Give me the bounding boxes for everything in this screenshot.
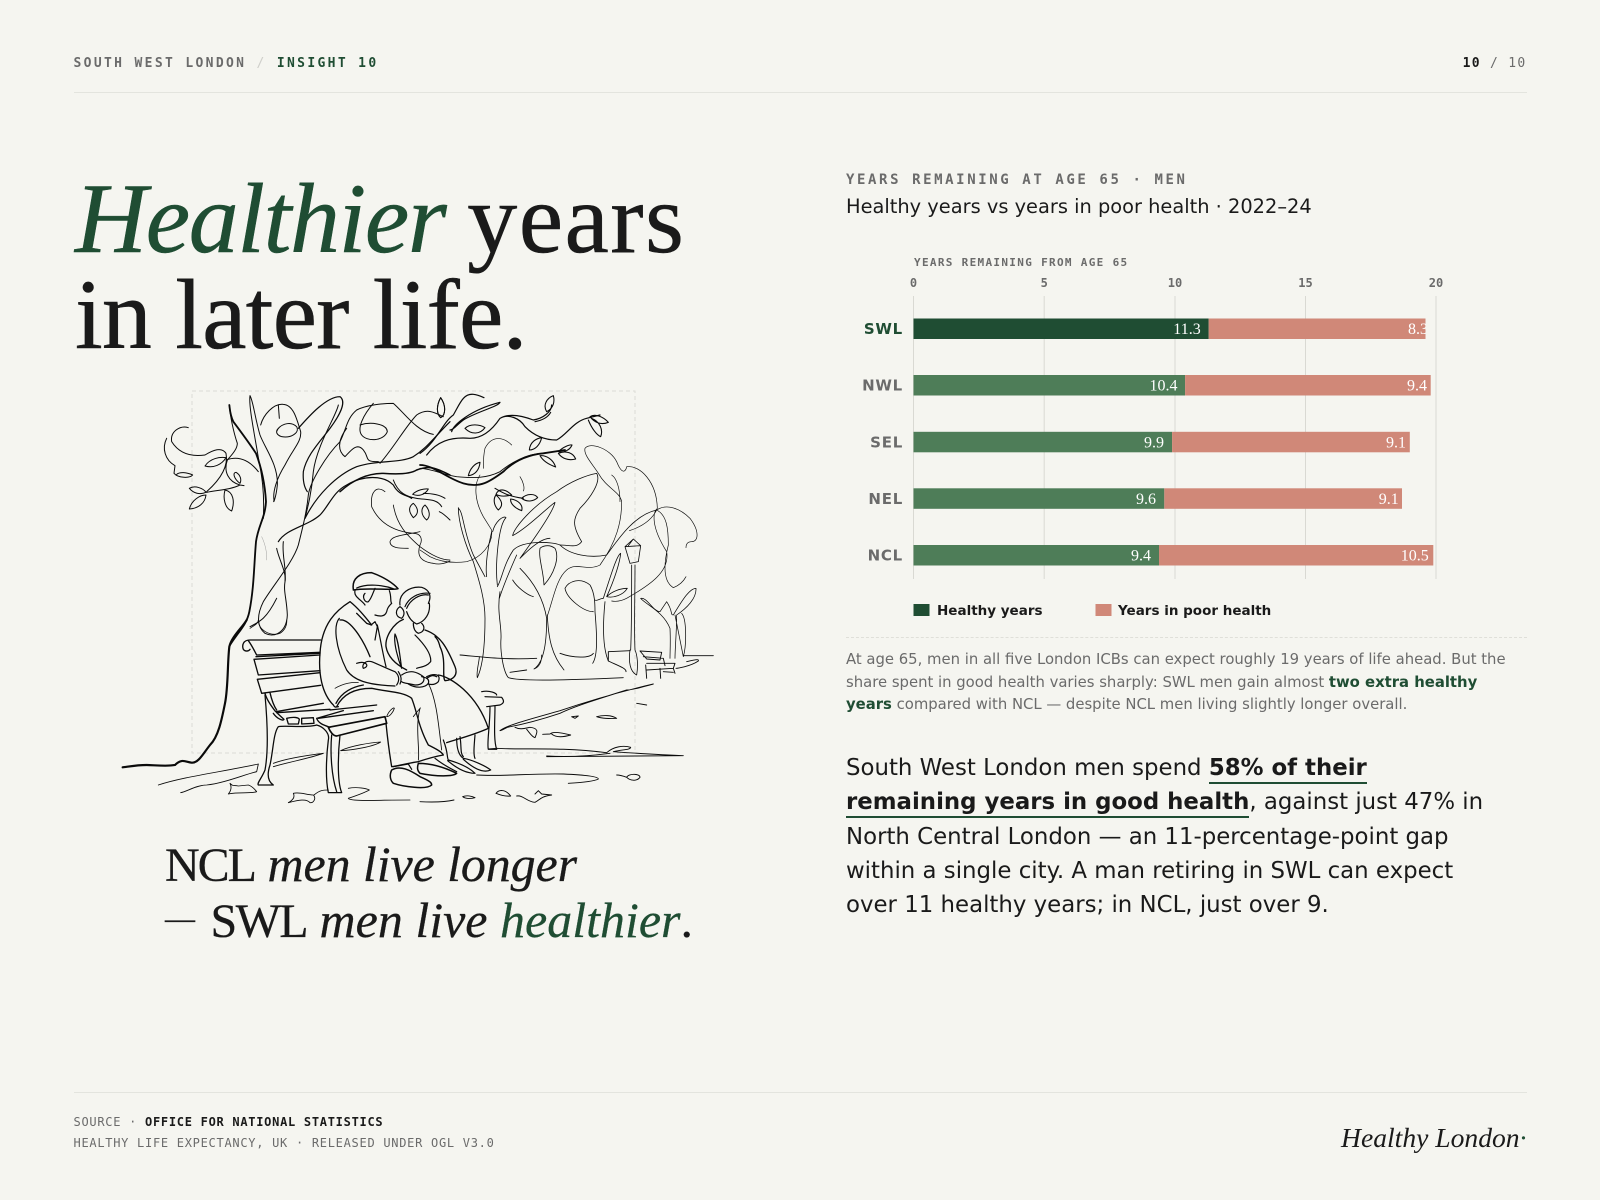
row: SWL: [864, 318, 1428, 339]
illustration: elderly couple on a park bench: [122, 390, 714, 804]
key finding paragraph: North Central London — an 11-percentage-point gap: [846, 824, 1449, 850]
commentary paragraph: years compared with NCL — despite NCL men living slightly longer overall.: [846, 696, 1407, 713]
footer: source: SOURCE · OFFICE FOR NATIONAL STATISTICS: [74, 1115, 383, 1129]
commentary paragraph: At age 65, men in all five London ICBs can expect roughly 19 years of life ahead. But the: [846, 651, 1506, 668]
axis ticks: 10: [1168, 276, 1182, 290]
row: SWL: SWL: [864, 320, 903, 338]
bar chart: healthy vs poor-health years by ICB: [862, 256, 1443, 619]
key finding paragraph: [846, 755, 1483, 918]
icon: street lamp: [625, 539, 641, 675]
axis ticks: 5: [1041, 276, 1048, 290]
axis ticks: 20: [1429, 276, 1443, 290]
key finding paragraph: remaining years in good health, against just 47% in: [846, 789, 1483, 815]
legend: Years in poor health: [1117, 603, 1271, 619]
header: page number: 10 / 10: [1463, 56, 1526, 71]
row: NWL: 9.4: [1407, 378, 1427, 394]
row: SEL: 9.1: [1386, 434, 1406, 451]
legend: [914, 603, 1271, 619]
axis title: YEARS REMAINING FROM AGE 65: [914, 256, 1128, 269]
row: NEL: 9.6: [1136, 491, 1156, 508]
row: SWL: 8.3: [1408, 321, 1428, 338]
pull quote: [164, 836, 693, 948]
row: NEL: NEL: [868, 490, 903, 508]
chart eyebrow: YEARS REMAINING AT AGE 65 · MEN: [846, 172, 1188, 188]
row: NCL: 10.5: [1401, 548, 1429, 564]
axis ticks: 0: [910, 276, 917, 290]
row: SWL: 11.3: [1173, 321, 1201, 338]
chart subtitle: Healthy years vs years in poor health · 2022–24: [846, 195, 1312, 218]
commentary paragraph: [846, 651, 1506, 713]
icon: canopy right and background trees: [420, 394, 713, 680]
pull quote: NCL men live longer: [165, 836, 577, 892]
key finding paragraph: within a single city. A man retiring in SWL can expect: [846, 858, 1453, 884]
row: NEL: 9.1: [1379, 491, 1399, 508]
title: [74, 163, 685, 370]
key finding paragraph: over 11 healthy years; in NCL, just over 9.: [846, 892, 1329, 918]
axis ticks: [910, 276, 1443, 290]
row: NCL: NCL: [868, 546, 903, 564]
footer: logo wordmark: Healthy London·: [1341, 1122, 1526, 1153]
row: SEL: 9.9: [1144, 434, 1164, 451]
header: breadcrumb: SOUTH WEST LONDON / INSIGHT 10: [74, 56, 379, 71]
icon: ground path and fallen leaves: [420, 684, 683, 802]
axis ticks: 15: [1298, 276, 1313, 290]
title: in later life.: [75, 259, 527, 370]
row: SEL: SEL: [870, 433, 903, 451]
icon: bench and lower trunk: [123, 620, 410, 803]
row: NWL: NWL: [862, 376, 903, 394]
legend: Healthy years: [937, 603, 1043, 619]
pull quote: — SWL men live healthier.: [165, 892, 693, 948]
footer: source: HEALTHY LIFE EXPECTANCY, UK · RELEASED UNDER OGL V3.0: [74, 1136, 495, 1150]
row: SEL: [870, 432, 1410, 452]
row: NEL: [868, 488, 1402, 509]
icon: main tree canopy left: [164, 396, 450, 645]
row: NWL: [862, 375, 1431, 396]
row: NWL: 10.4: [1150, 378, 1178, 394]
row: NCL: 9.4: [1131, 548, 1151, 564]
icon: man and woman seated: [320, 573, 503, 788]
footer: source: [74, 1115, 495, 1150]
title: Healthier years: [75, 163, 685, 274]
key finding paragraph: South West London men spend 58% of their: [846, 755, 1367, 781]
commentary paragraph: share spent in good health varies sharply: SWL men gain almost two extra healthy: [846, 674, 1477, 691]
row: NCL: [868, 545, 1433, 566]
